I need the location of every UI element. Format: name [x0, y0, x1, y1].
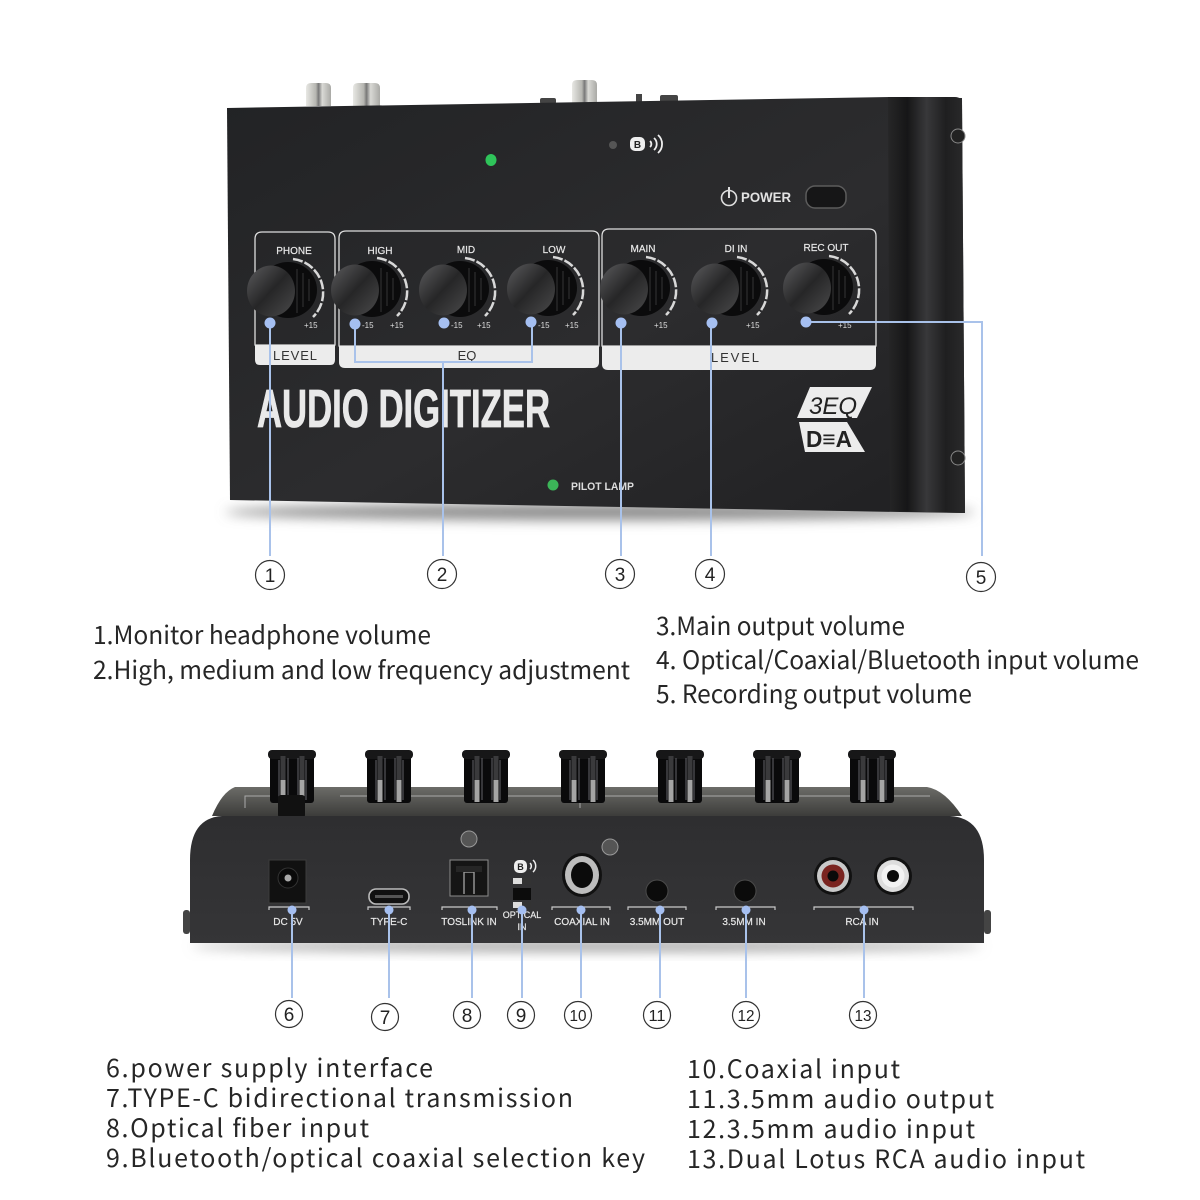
callout numbers 1-5 [256, 560, 996, 592]
panel: top view of audio digitizer [225, 80, 975, 520]
panel: output level group: REC OUT [804, 243, 848, 254]
port: USB type-C [369, 889, 409, 904]
text block: rear panel legend left: 7.TYPE-C bidirectional transmission [106, 1079, 573, 1115]
port labels: DC 5V [273, 917, 303, 928]
text block: rear panel legend left: 9.Bluetooth/optical coaxial selection key [106, 1139, 645, 1175]
port: coaxial [562, 853, 602, 897]
badge: 3EQ D/A: 3EQ [809, 393, 857, 420]
callout numbers 6-13: 12 [738, 1008, 755, 1025]
callout numbers 1-5: 2 [437, 565, 447, 586]
panel: rear view of audio digitizer [183, 750, 991, 951]
callout numbers 1-5: 3 [615, 565, 625, 586]
badge: 3EQ D/A [797, 387, 872, 452]
panel: EQ group: EQ [458, 348, 476, 363]
port: 3.5mm in [734, 880, 756, 902]
panel: EQ group: HIGH [368, 246, 392, 257]
port: DC jack [269, 860, 306, 903]
bluetooth indicator: B [634, 140, 641, 151]
knobs [247, 256, 859, 318]
knobs rear [268, 750, 896, 803]
text block: rear panel legend left: 6.power supply interface [106, 1049, 433, 1085]
power label and button [722, 186, 846, 208]
callout numbers 1-5: 1 [265, 566, 275, 587]
knob scale labels: -15 [538, 321, 550, 330]
power label and button: POWER [741, 189, 791, 205]
callout numbers 6-13: 9 [516, 1006, 526, 1027]
text block: front panel legend right [656, 607, 1139, 711]
port labels: IN [518, 922, 526, 932]
port labels: TYPE-C [371, 917, 407, 928]
top surface [212, 787, 962, 816]
text block: rear panel legend right: 13.Dual Lotus RCA audio input [687, 1140, 1086, 1176]
text block: front panel legend right: 3.Main output volume [656, 607, 905, 643]
switch: bluetooth / optical [513, 860, 536, 908]
text block: rear panel legend right: 12.3.5mm audio input [687, 1110, 976, 1146]
text block: front panel legend right: 5. Recording output volume [656, 675, 972, 711]
port: TOSLINK [450, 860, 488, 896]
port: 3.5mm out [646, 880, 668, 902]
callout lines: rear view [288, 906, 868, 998]
port: RCA white [874, 857, 912, 895]
knob scale labels: +15 [477, 321, 491, 330]
port labels: TOSLINK IN [441, 917, 497, 928]
port labels: COAXIAL IN [554, 917, 610, 928]
pilot lamp [548, 480, 634, 493]
badge: 3EQ D/A: D≡A [806, 426, 852, 452]
callout numbers 6-13 [276, 1000, 876, 1030]
panel: EQ group [339, 231, 599, 368]
knob scale labels: -15 [451, 321, 463, 330]
text block: rear panel legend right: 10.Coaxial input [687, 1050, 901, 1086]
port: RCA red [814, 857, 852, 895]
panel: output level group: MAIN [630, 244, 656, 255]
text block: front panel legend right: 4. Optical/Coaxial/Bluetooth input volume [656, 641, 1139, 677]
text block: rear panel legend left [106, 1049, 645, 1175]
panel: phone level group: PHONE [276, 246, 312, 257]
callout numbers 1-5: 5 [976, 568, 986, 589]
port labels [273, 910, 879, 932]
knob scale labels: -15 [362, 321, 374, 330]
panel: output level group: LEVEL [711, 350, 759, 365]
switch: bluetooth / optical: B [517, 862, 524, 872]
panel: output level group: DI IN [725, 244, 747, 255]
callout numbers 6-13: 6 [284, 1005, 294, 1026]
screws [461, 831, 618, 855]
callout numbers 6-13: 13 [854, 1008, 872, 1025]
text block: front panel legend left: 1.Monitor headphone volume [93, 616, 431, 652]
port labels: 3.5MM IN [722, 917, 766, 928]
text block: front panel legend left [93, 616, 631, 687]
panel: output level group [602, 229, 876, 370]
port labels: OPTICAL [503, 910, 541, 920]
knob scale labels: +15 [838, 321, 852, 330]
panel: EQ group: MID [457, 245, 475, 256]
product name: AUDIO DIGITIZER [257, 379, 550, 439]
text block: rear panel legend left: 8.Optical fiber input [106, 1109, 370, 1145]
side screws [951, 129, 965, 465]
port labels: RCA IN [845, 917, 879, 928]
pilot lamp: PILOT LAMP [571, 481, 634, 493]
knob scale labels [304, 321, 852, 330]
panel: EQ group: LOW [543, 245, 566, 256]
port labels: 3.5MM OUT [630, 917, 684, 928]
knob scale labels: +15 [746, 321, 760, 330]
panel: phone level group [255, 232, 335, 365]
green LED [486, 154, 496, 166]
knob scale labels: +15 [390, 321, 404, 330]
callout numbers 6-13: 10 [570, 1008, 587, 1025]
knob scale labels: +15 [654, 321, 668, 330]
port brackets [269, 907, 913, 910]
bluetooth indicator [609, 135, 662, 153]
text block: rear panel legend right [687, 1050, 1086, 1176]
panel: phone level group: LEVEL [273, 348, 317, 363]
rear body [190, 816, 984, 943]
text block: rear panel legend right: 11.3.5mm audio output [687, 1080, 995, 1116]
top rear connectors [306, 80, 678, 106]
device body [227, 97, 965, 513]
knob scale labels: +15 [304, 321, 318, 330]
callout lines: top view [264, 316, 982, 556]
callout numbers 1-5: 4 [705, 565, 716, 586]
callout numbers 6-13: 8 [462, 1006, 472, 1027]
callout numbers 6-13: 11 [648, 1008, 666, 1025]
knob scale labels: +15 [565, 321, 579, 330]
text block: front panel legend left: 2.High, medium and low frequency adjustment [93, 651, 631, 687]
callout numbers 6-13: 7 [380, 1008, 390, 1029]
